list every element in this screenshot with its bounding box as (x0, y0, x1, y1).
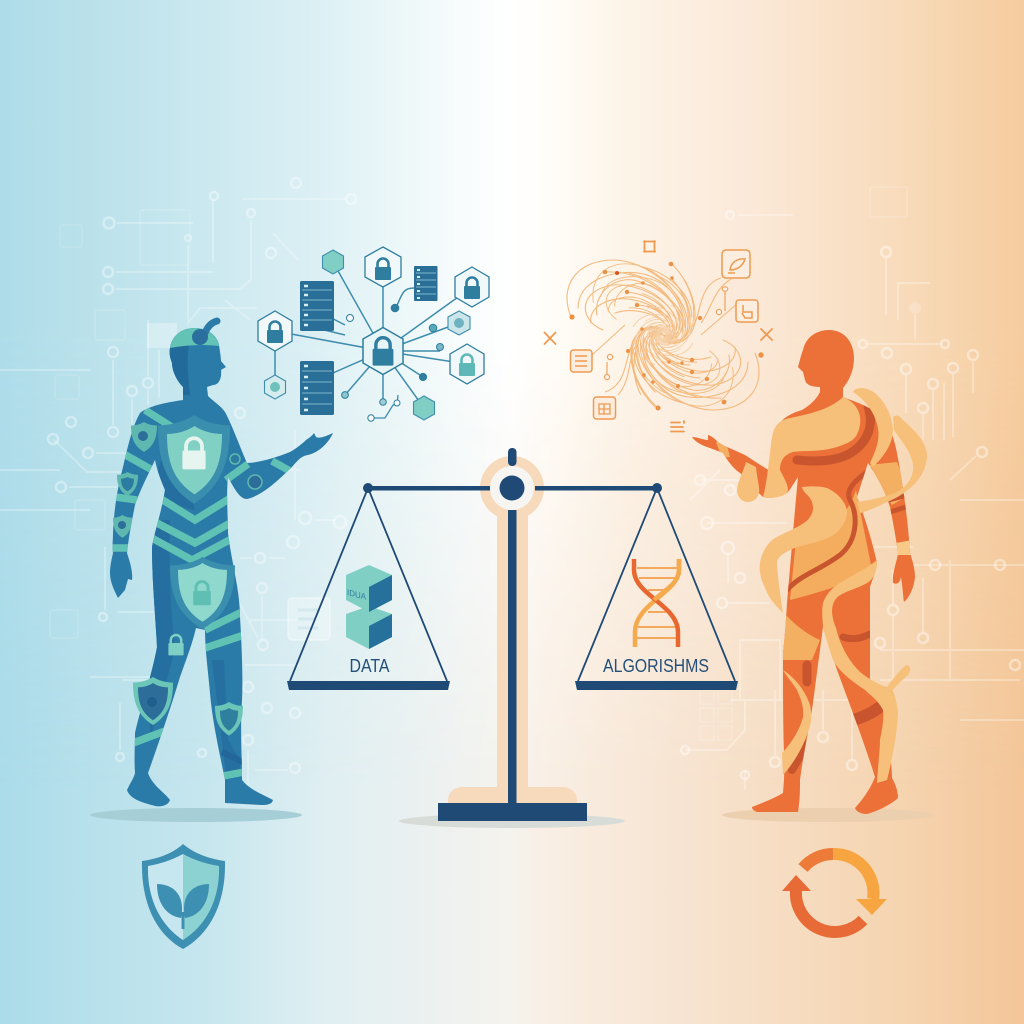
hip shield with lock (170, 557, 235, 629)
shin shield (215, 702, 243, 736)
recycle arrows icon (782, 854, 887, 932)
ribbon: outer arm loop (857, 416, 927, 513)
server rack left top (300, 281, 334, 331)
background circuit pattern: right (681, 187, 1024, 790)
left pan (287, 681, 450, 690)
pivot ring (490, 466, 534, 510)
shield inner right (183, 854, 219, 940)
head cap (170, 328, 219, 348)
ribbon: left leg (782, 670, 811, 775)
background gradient: upper bright tone (404, 0, 974, 610)
swirl dots (569, 262, 764, 410)
hexagon locks (258, 247, 489, 384)
shield inner left (148, 854, 183, 940)
lower arrow (796, 890, 863, 932)
small hexagon badges (264, 250, 470, 420)
head antenna (192, 321, 217, 345)
algorithm icon boxes (570, 250, 758, 419)
cross and frame glyphs (544, 241, 772, 432)
algorithm swirl (544, 241, 772, 432)
body silhouette (110, 328, 333, 806)
swirl lines (567, 256, 759, 414)
arm shields (113, 422, 262, 538)
connector lines (275, 262, 472, 408)
small connector with nodes (372, 395, 398, 418)
ground shadow: right figure (722, 808, 934, 822)
ALGORISHMS label: ALGORISHMS (603, 656, 709, 676)
small thigh lock (168, 635, 184, 655)
faint document icon (288, 598, 330, 640)
shield outline (142, 844, 225, 949)
cube label: IDUA (347, 587, 366, 602)
scale strings (290, 488, 735, 681)
shield leaf icon (142, 844, 225, 949)
network diagram (258, 247, 489, 421)
scale navy parts (363, 448, 662, 821)
upper arrow (803, 854, 833, 868)
balance scale (287, 448, 738, 821)
ground shadow: scale (399, 814, 625, 828)
blue figure with shields (110, 321, 333, 806)
background circuit pattern: left (0, 178, 356, 800)
body ribbons clipped to silhouette (716, 407, 912, 770)
ground shadow: left figure (90, 808, 302, 822)
knee shield (133, 677, 173, 725)
ribbon: waist S curve (760, 486, 847, 613)
DNA helix (634, 559, 679, 647)
body shading and stripes (112, 330, 290, 776)
chest shield with lock (158, 415, 230, 504)
faint image tile behind head (147, 323, 177, 348)
ribbon: hip to ankle (822, 560, 910, 783)
ribbon: upper loop (853, 388, 893, 467)
right pan (575, 681, 738, 690)
ribbon: drop on forearm (737, 462, 759, 502)
server rack right (414, 266, 438, 301)
body silhouette (692, 330, 915, 814)
DATA label: DATA (350, 656, 390, 676)
data cubes (346, 565, 392, 649)
centre hexagon lock (363, 328, 403, 374)
orange figure with ribbons (692, 330, 927, 814)
ribbon: neck and shoulder wrap (763, 397, 860, 498)
server rack left bottom (300, 361, 334, 415)
leaves (157, 884, 209, 929)
scale peach post and base (448, 456, 577, 803)
small hollow connectors (604, 287, 728, 380)
network nodes (342, 304, 444, 421)
